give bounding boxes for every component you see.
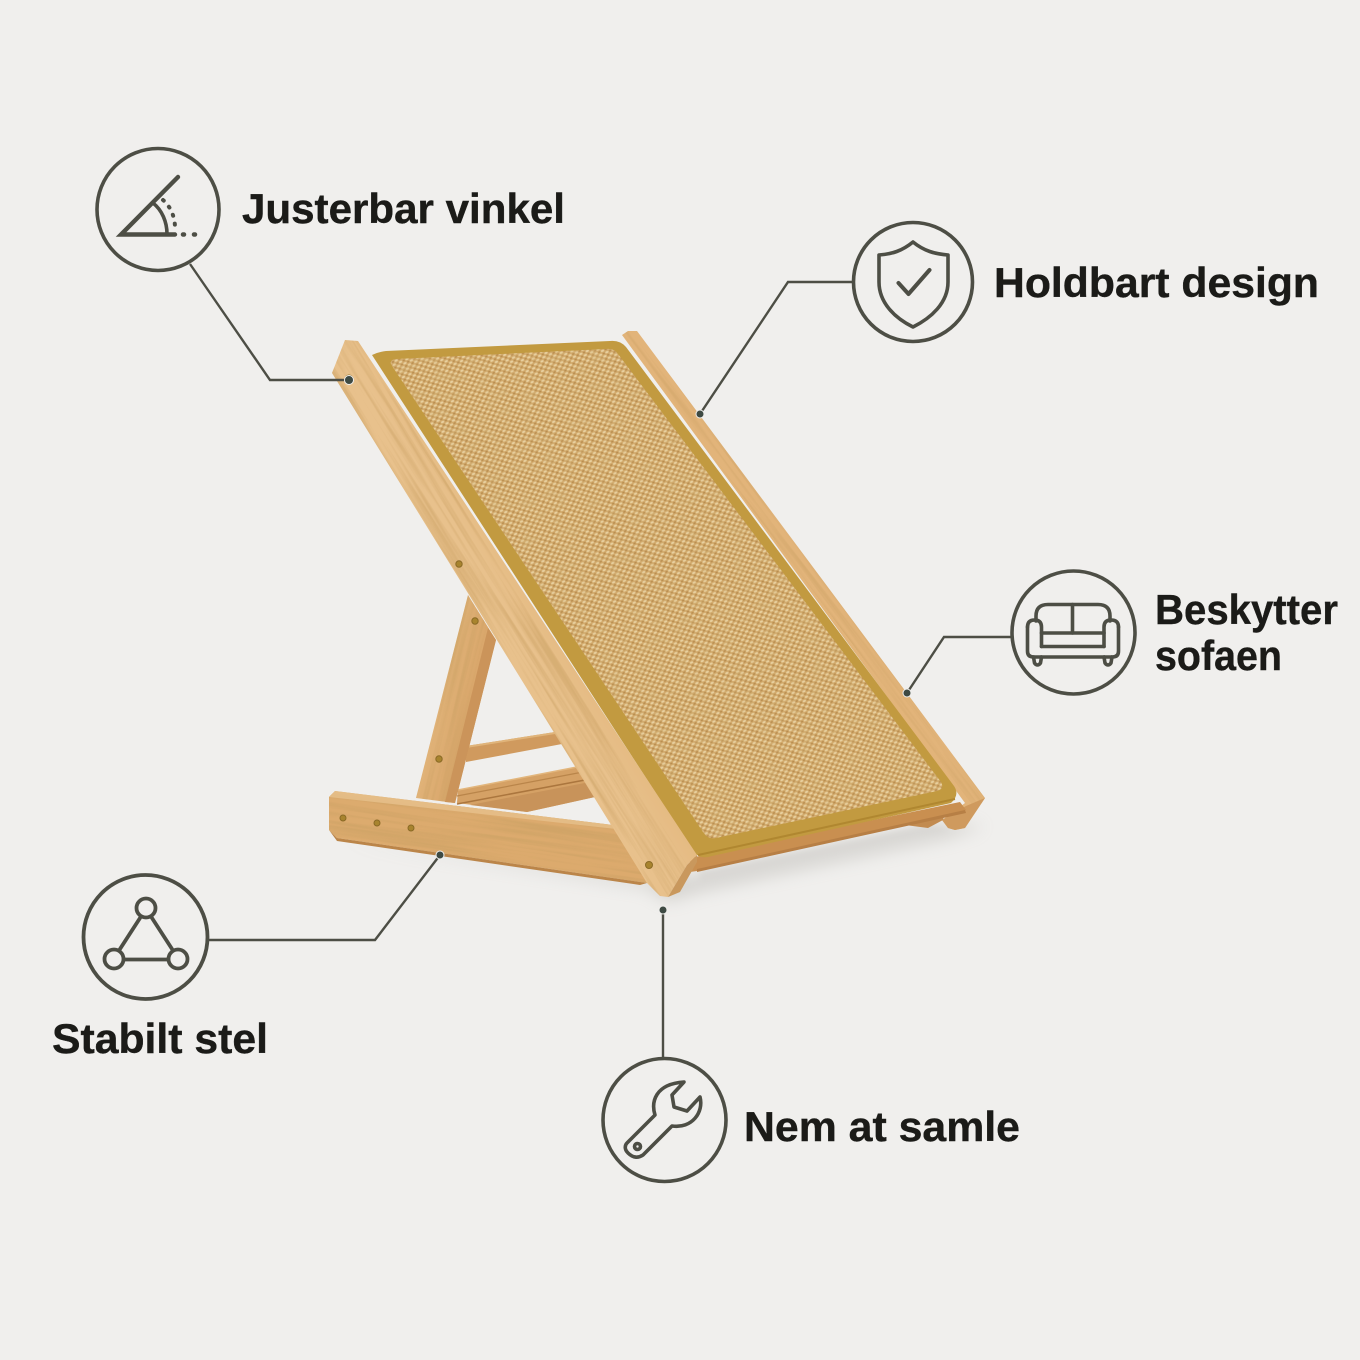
label: Nem at samle [744,1103,1020,1150]
carpet base plate [690,802,966,872]
callout: Beskytter sofaen [903,571,1338,697]
leader line: durable [696,282,854,418]
back rail [622,331,985,830]
upper cross rod [466,732,562,762]
front rail [332,340,697,897]
callout: Nem at samle [603,906,1020,1182]
leader line: stable [208,851,444,940]
label: sofaen [1155,632,1282,679]
rear foot [905,812,945,828]
icon: triangle [84,875,208,999]
infographic canvas [53,146,1338,1184]
leader line: sofa [903,637,1012,697]
lower cross rods [457,767,595,812]
label: Justerbar vinkel [242,185,565,232]
label: Stabilt stel [52,1015,268,1062]
product: adjustable pet ramp [302,299,998,925]
callout: Stabilt stel [52,851,444,1062]
base rail [329,791,647,885]
label [1155,586,1338,679]
icon: angle [97,148,219,270]
carpet binding [372,341,956,857]
support leg [416,595,496,803]
brass screws [340,375,652,868]
sisal scratching surface [380,340,950,850]
label: Holdbart design [994,259,1319,306]
leader line: angle [190,264,354,384]
callout: Holdbart design [696,222,1319,418]
ground shadow [340,824,985,902]
callout: Justerbar vinkel [97,148,565,384]
icon: wrench [603,1058,726,1182]
icon: sofa [1012,571,1135,694]
label: Beskytter [1155,586,1338,633]
icon: shield [854,222,972,342]
leader line: assembly [659,906,667,1057]
